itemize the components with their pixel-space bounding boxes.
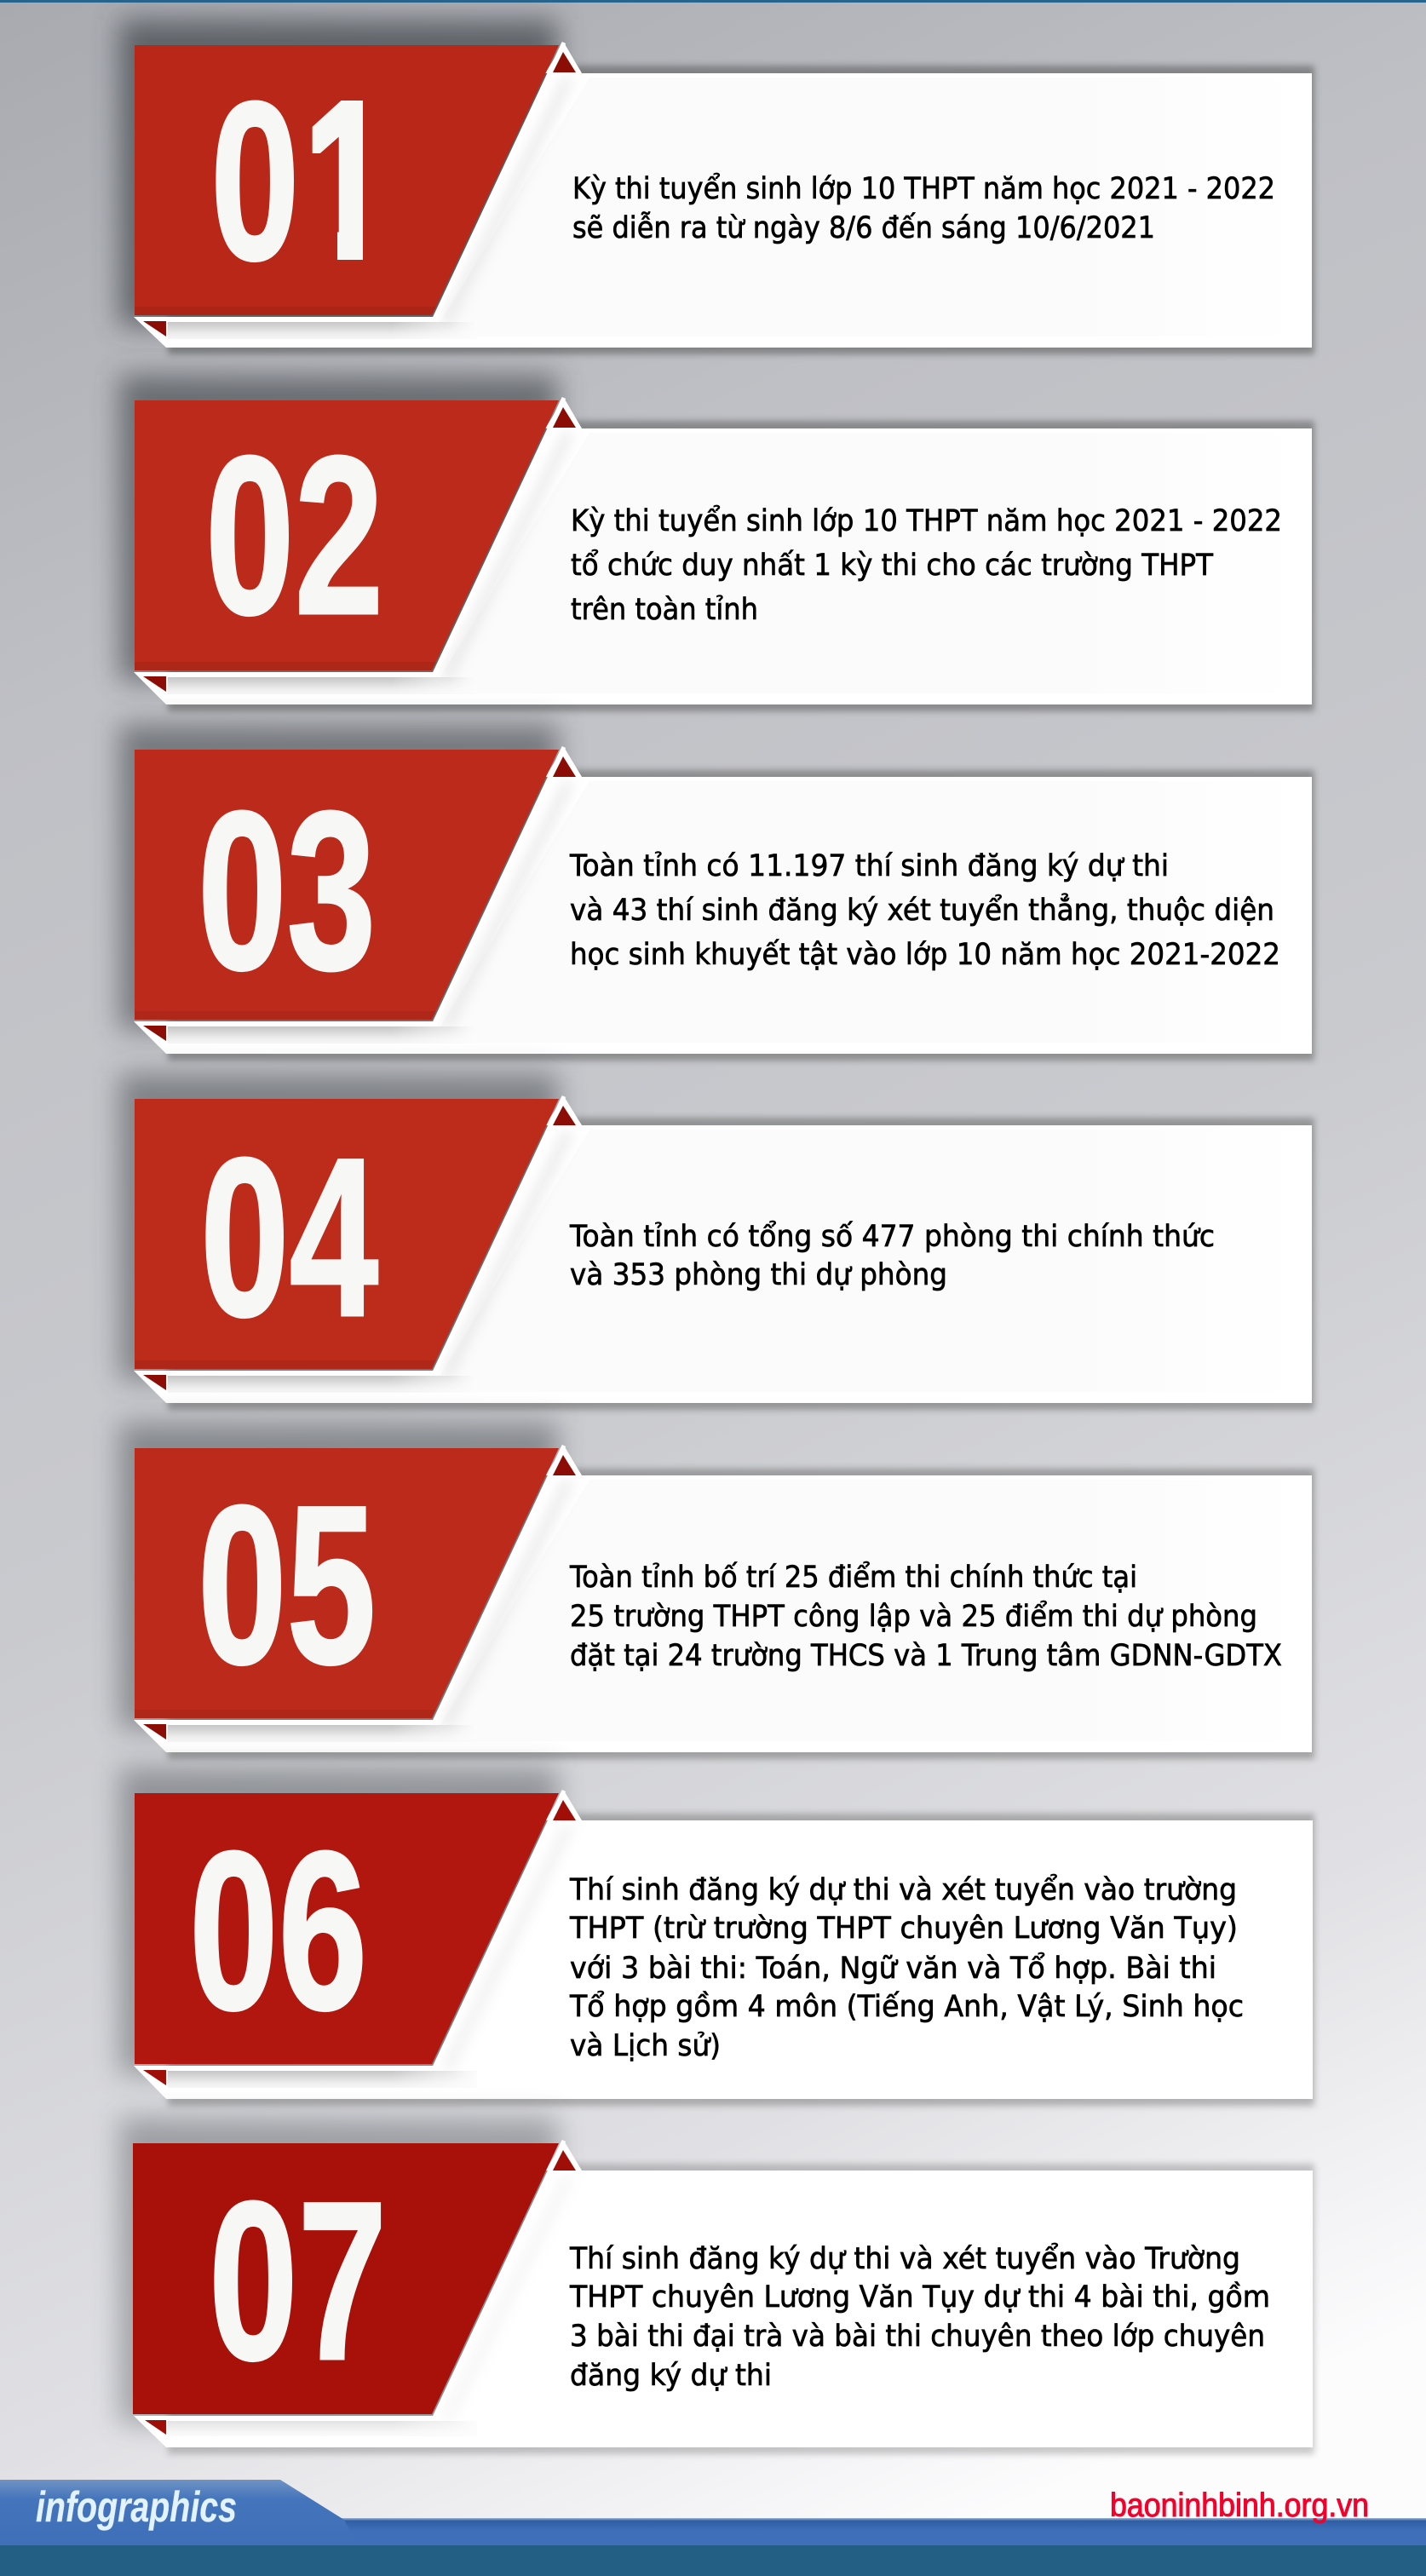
red number block bbox=[135, 750, 559, 1020]
red number block bbox=[135, 1448, 559, 1718]
source url: baoninhbinh.org.vn bbox=[1110, 2487, 1369, 2524]
red number block bbox=[133, 2143, 559, 2414]
text block 03: Toàn tỉnh có 11.197 thí sinh đăng ký dự thi bbox=[569, 849, 1169, 883]
text block 03: và 43 thí sinh đăng ký xét tuyển thẳng, thuộc diện bbox=[570, 893, 1274, 928]
text block 06: Tổ hợp gồm 4 môn (Tiếng Anh, Vật Lý, Sinh học bbox=[569, 1990, 1244, 2024]
text block 01 bbox=[572, 172, 1275, 245]
text block 06: Thí sinh đăng ký dự thi và xét tuyển vào trường bbox=[569, 1873, 1237, 1907]
footer bbox=[0, 2480, 1426, 2576]
top rule bbox=[0, 0, 1426, 3]
panel: item 05 bbox=[119, 1423, 1314, 1759]
text block 05 bbox=[569, 1561, 1282, 1673]
text block 04 bbox=[569, 1220, 1215, 1292]
text block 05: đặt tại 24 trường THCS và 1 Trung tâm GDNN-GDTX bbox=[570, 1639, 1282, 1673]
number 07: 07 bbox=[209, 2154, 387, 2407]
text block 04: và 353 phòng thi dự phòng bbox=[570, 1258, 947, 1292]
red number block bbox=[135, 1793, 559, 2064]
footer tab bbox=[0, 2480, 358, 2545]
text block 07: THPT chuyên Lương Văn Tụy dự thi 4 bài thi, gồm bbox=[569, 2280, 1270, 2314]
number 01 bbox=[216, 101, 363, 262]
text block 07: Thí sinh đăng ký dự thi và xét tuyển vào Trường bbox=[569, 2242, 1240, 2276]
text block 04: Toàn tỉnh có tổng số 477 phòng thi chính thức bbox=[569, 1220, 1215, 1254]
text block 06: với 3 bài thi: Toán, Ngữ văn và Tổ hợp. Bài thi bbox=[570, 1952, 1216, 1986]
number 04: 04 bbox=[200, 1111, 378, 1364]
text block 07 bbox=[569, 2242, 1270, 2393]
number 01: 1 bbox=[304, 55, 394, 308]
number 02: 02 bbox=[205, 409, 383, 662]
text block 02: trên toàn tỉnh bbox=[571, 593, 758, 627]
text block 07: 3 bài thi đại trà và bài thi chuyên theo lớp chuyên bbox=[570, 2320, 1265, 2354]
text block 02: Kỳ thi tuyển sinh lớp 10 THPT năm học 2021 - 2022 bbox=[571, 504, 1282, 538]
text block 02: tổ chức duy nhất 1 kỳ thi cho các trường THPT bbox=[571, 549, 1214, 583]
red number block bbox=[135, 45, 559, 315]
text block 06: THPT (trừ trường THPT chuyên Lương Văn Tụy) bbox=[569, 1912, 1238, 1946]
text block 01: Kỳ thi tuyển sinh lớp 10 THPT năm học 2021 - 2022 bbox=[572, 172, 1275, 206]
footer base strip bbox=[0, 2545, 1426, 2576]
number 06: 06 bbox=[189, 1804, 367, 2057]
text block 03 bbox=[569, 849, 1280, 972]
text block 05: Toàn tỉnh bố trí 25 điểm thi chính thức tại bbox=[569, 1561, 1137, 1595]
panel: item 06 bbox=[119, 1768, 1314, 2106]
panel: item 02 bbox=[119, 375, 1314, 711]
text block 07: đăng ký dự thi bbox=[570, 2359, 772, 2393]
text block 06: và Lịch sử) bbox=[570, 2029, 721, 2063]
text block 01: sẽ diễn ra từ ngày 8/6 đến sáng 10/6/2021 bbox=[572, 211, 1155, 245]
number 03: 03 bbox=[198, 764, 376, 1017]
infographics label: infographics bbox=[36, 2483, 237, 2531]
panel: item 01 bbox=[119, 20, 1314, 354]
red number block bbox=[135, 1099, 559, 1369]
panel: item 07 bbox=[119, 2118, 1314, 2454]
text block 06 bbox=[569, 1873, 1244, 2063]
text block 03: học sinh khuyết tật vào lớp 10 năm học 2021-2022 bbox=[570, 938, 1280, 972]
panel: item 03 bbox=[119, 724, 1314, 1061]
red number block bbox=[135, 400, 559, 670]
text block 05: 25 trường THPT công lập và 25 điểm thi dự phòng bbox=[570, 1600, 1257, 1634]
text block 02 bbox=[571, 504, 1282, 627]
number 01: 0 bbox=[210, 55, 300, 308]
panel: item 04 bbox=[119, 1073, 1314, 1410]
number 05: 05 bbox=[198, 1458, 376, 1711]
